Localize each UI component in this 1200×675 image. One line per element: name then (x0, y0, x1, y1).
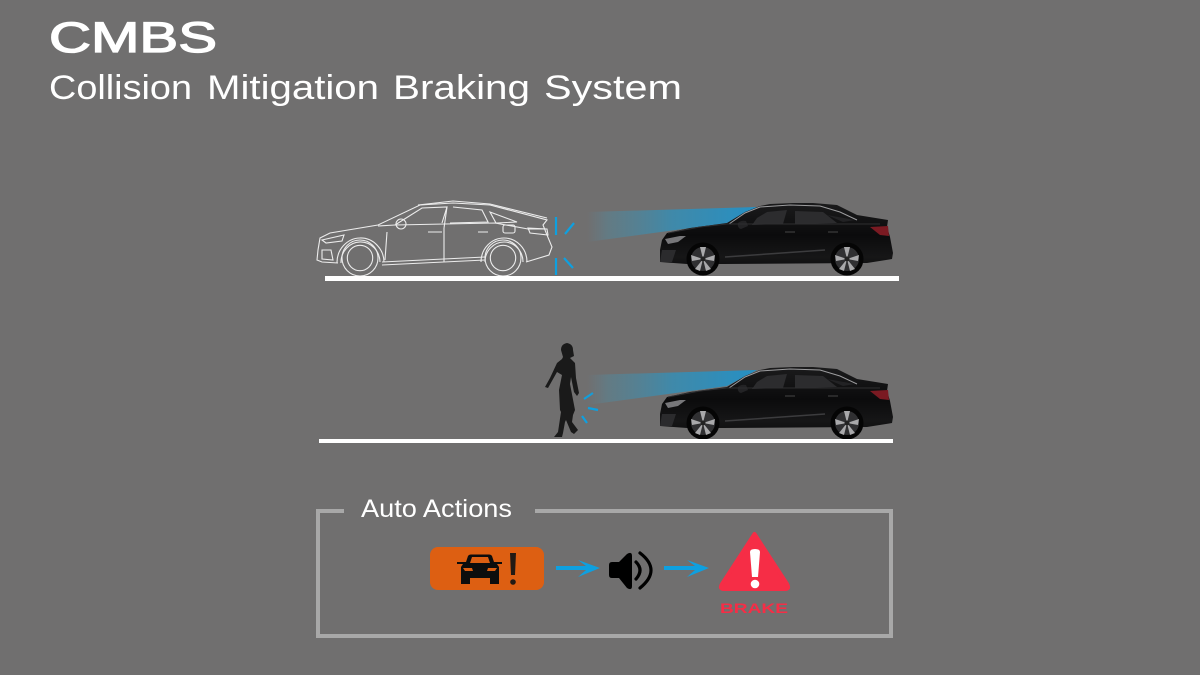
subtitle: Collision (49, 69, 192, 107)
outlined car ahead (317, 201, 552, 276)
panel: auto actions (318, 495, 891, 636)
icon: forward collision warning (430, 547, 544, 590)
title: CMBS (49, 14, 217, 62)
panel frame (318, 511, 891, 636)
radar beam (587, 370, 757, 405)
road line (325, 276, 899, 281)
detection rays (556, 217, 574, 275)
radar beam (587, 207, 757, 242)
subtitle: Braking (393, 69, 530, 107)
arrow (556, 560, 600, 577)
arrow (664, 560, 709, 577)
icon: brake warning (720, 534, 788, 616)
pedestrian rays (582, 393, 598, 423)
scene: car ahead (317, 201, 899, 281)
subtitle: Mitigation (207, 69, 379, 107)
scene: pedestrian (319, 343, 893, 443)
road line (319, 439, 893, 443)
black car with sensor (660, 203, 893, 276)
pedestrian silhouette (545, 343, 579, 437)
brake label: BRAKE (720, 600, 788, 616)
icon: speaker (609, 553, 651, 589)
black car with sensor (660, 367, 893, 440)
subtitle: System (544, 69, 682, 107)
panel heading: Auto Actions (361, 495, 512, 523)
subtitle (49, 69, 682, 107)
